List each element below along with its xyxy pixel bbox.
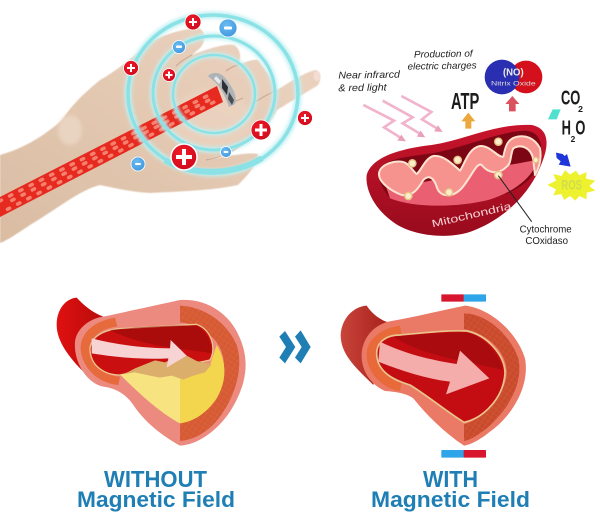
red blood vessel band bbox=[0, 86, 223, 217]
mitochondrion body bbox=[366, 125, 547, 236]
wall cross-section right bbox=[464, 313, 519, 441]
ROS burst: ROS bbox=[561, 177, 582, 193]
wall cross-section right bbox=[180, 306, 239, 441]
wall cross-section left bbox=[81, 318, 120, 385]
H2O label: H bbox=[562, 118, 571, 140]
flow arrow bbox=[92, 338, 187, 368]
vessel without magnetic field bbox=[57, 298, 246, 446]
dark lumen shading bbox=[393, 332, 503, 370]
vessel with magnetic field bbox=[341, 294, 526, 458]
caption: without magnetic field: Magnetic Field bbox=[77, 487, 235, 512]
H2O label: O bbox=[575, 118, 585, 140]
flow arrow bbox=[378, 342, 489, 394]
plaque crust bbox=[120, 356, 212, 380]
charges label: Production of bbox=[414, 49, 474, 61]
fingertip nail bbox=[314, 71, 320, 81]
caption: without magnetic field: WITHOUT bbox=[104, 466, 207, 492]
outer membrane bbox=[366, 125, 547, 236]
ATP label: ATP bbox=[451, 88, 479, 114]
outer tube bbox=[341, 306, 388, 385]
hand illustration bbox=[0, 14, 320, 243]
charge particles bbox=[124, 14, 312, 171]
silver ring bbox=[208, 73, 236, 107]
caption: with magnetic field: Magnetic Field bbox=[371, 487, 530, 512]
lumen bbox=[377, 331, 505, 422]
cristae fold bbox=[379, 136, 541, 195]
charges label: electric charges bbox=[408, 60, 477, 73]
nitric oxide bubbles: Nitrix Oxide bbox=[491, 80, 536, 87]
bottom magnet bbox=[441, 450, 486, 458]
nitric oxide bubbles bbox=[485, 60, 542, 94]
CO2 label: CO bbox=[561, 88, 580, 110]
ROS burst bbox=[547, 170, 595, 201]
vessel wall bbox=[362, 306, 526, 446]
caption: with magnetic field bbox=[371, 466, 530, 512]
nitric oxide bubbles: (NO) bbox=[503, 67, 524, 78]
H2O label: 2 bbox=[571, 134, 575, 144]
matrix salmon bbox=[385, 160, 537, 206]
vessel wall bbox=[75, 300, 246, 446]
wrist bone highlight bbox=[58, 115, 82, 145]
caption: with magnetic field: WITH bbox=[423, 466, 478, 492]
palm shading bbox=[168, 90, 252, 150]
lumen bbox=[90, 324, 213, 375]
near infrared label: & red light bbox=[338, 82, 388, 94]
near infrared label: Near infrarcd bbox=[338, 70, 401, 82]
granules bbox=[405, 138, 538, 200]
wall cross-section left bbox=[367, 326, 402, 391]
nitric oxide arrow bbox=[505, 96, 519, 111]
dark lumen shading bbox=[110, 326, 212, 353]
glow rings bbox=[128, 15, 298, 173]
H2O label bbox=[562, 118, 585, 144]
light zigzag arrows bbox=[363, 96, 443, 141]
near infrared label bbox=[338, 70, 401, 94]
cytochrome label: COxidaso bbox=[525, 236, 568, 247]
wall texture bbox=[180, 306, 239, 441]
CO2 label: 2 bbox=[578, 104, 583, 114]
charges label bbox=[408, 49, 477, 73]
mitochondria label: Mitochondria bbox=[431, 201, 513, 230]
hand silhouette bbox=[0, 28, 320, 243]
finger creases bbox=[176, 55, 277, 160]
ATP arrow bbox=[461, 113, 475, 129]
double chevron bbox=[279, 330, 311, 363]
wall texture bbox=[464, 313, 519, 441]
cytochrome label bbox=[520, 225, 572, 247]
CO2 label bbox=[561, 88, 583, 114]
mitochondria diagram labels bbox=[338, 49, 595, 247]
top magnet bbox=[441, 294, 486, 302]
blue arrow bbox=[556, 153, 571, 167]
yellow plaque right bbox=[180, 345, 224, 423]
cytochrome pointer bbox=[498, 176, 532, 222]
inner chamber bbox=[378, 131, 541, 206]
outer tube bbox=[57, 298, 103, 372]
yellow plaque left bbox=[120, 361, 180, 423]
teal arrow bbox=[548, 109, 561, 119]
caption: without magnetic field bbox=[77, 466, 235, 512]
cytochrome label: Cytochrome bbox=[520, 225, 572, 236]
